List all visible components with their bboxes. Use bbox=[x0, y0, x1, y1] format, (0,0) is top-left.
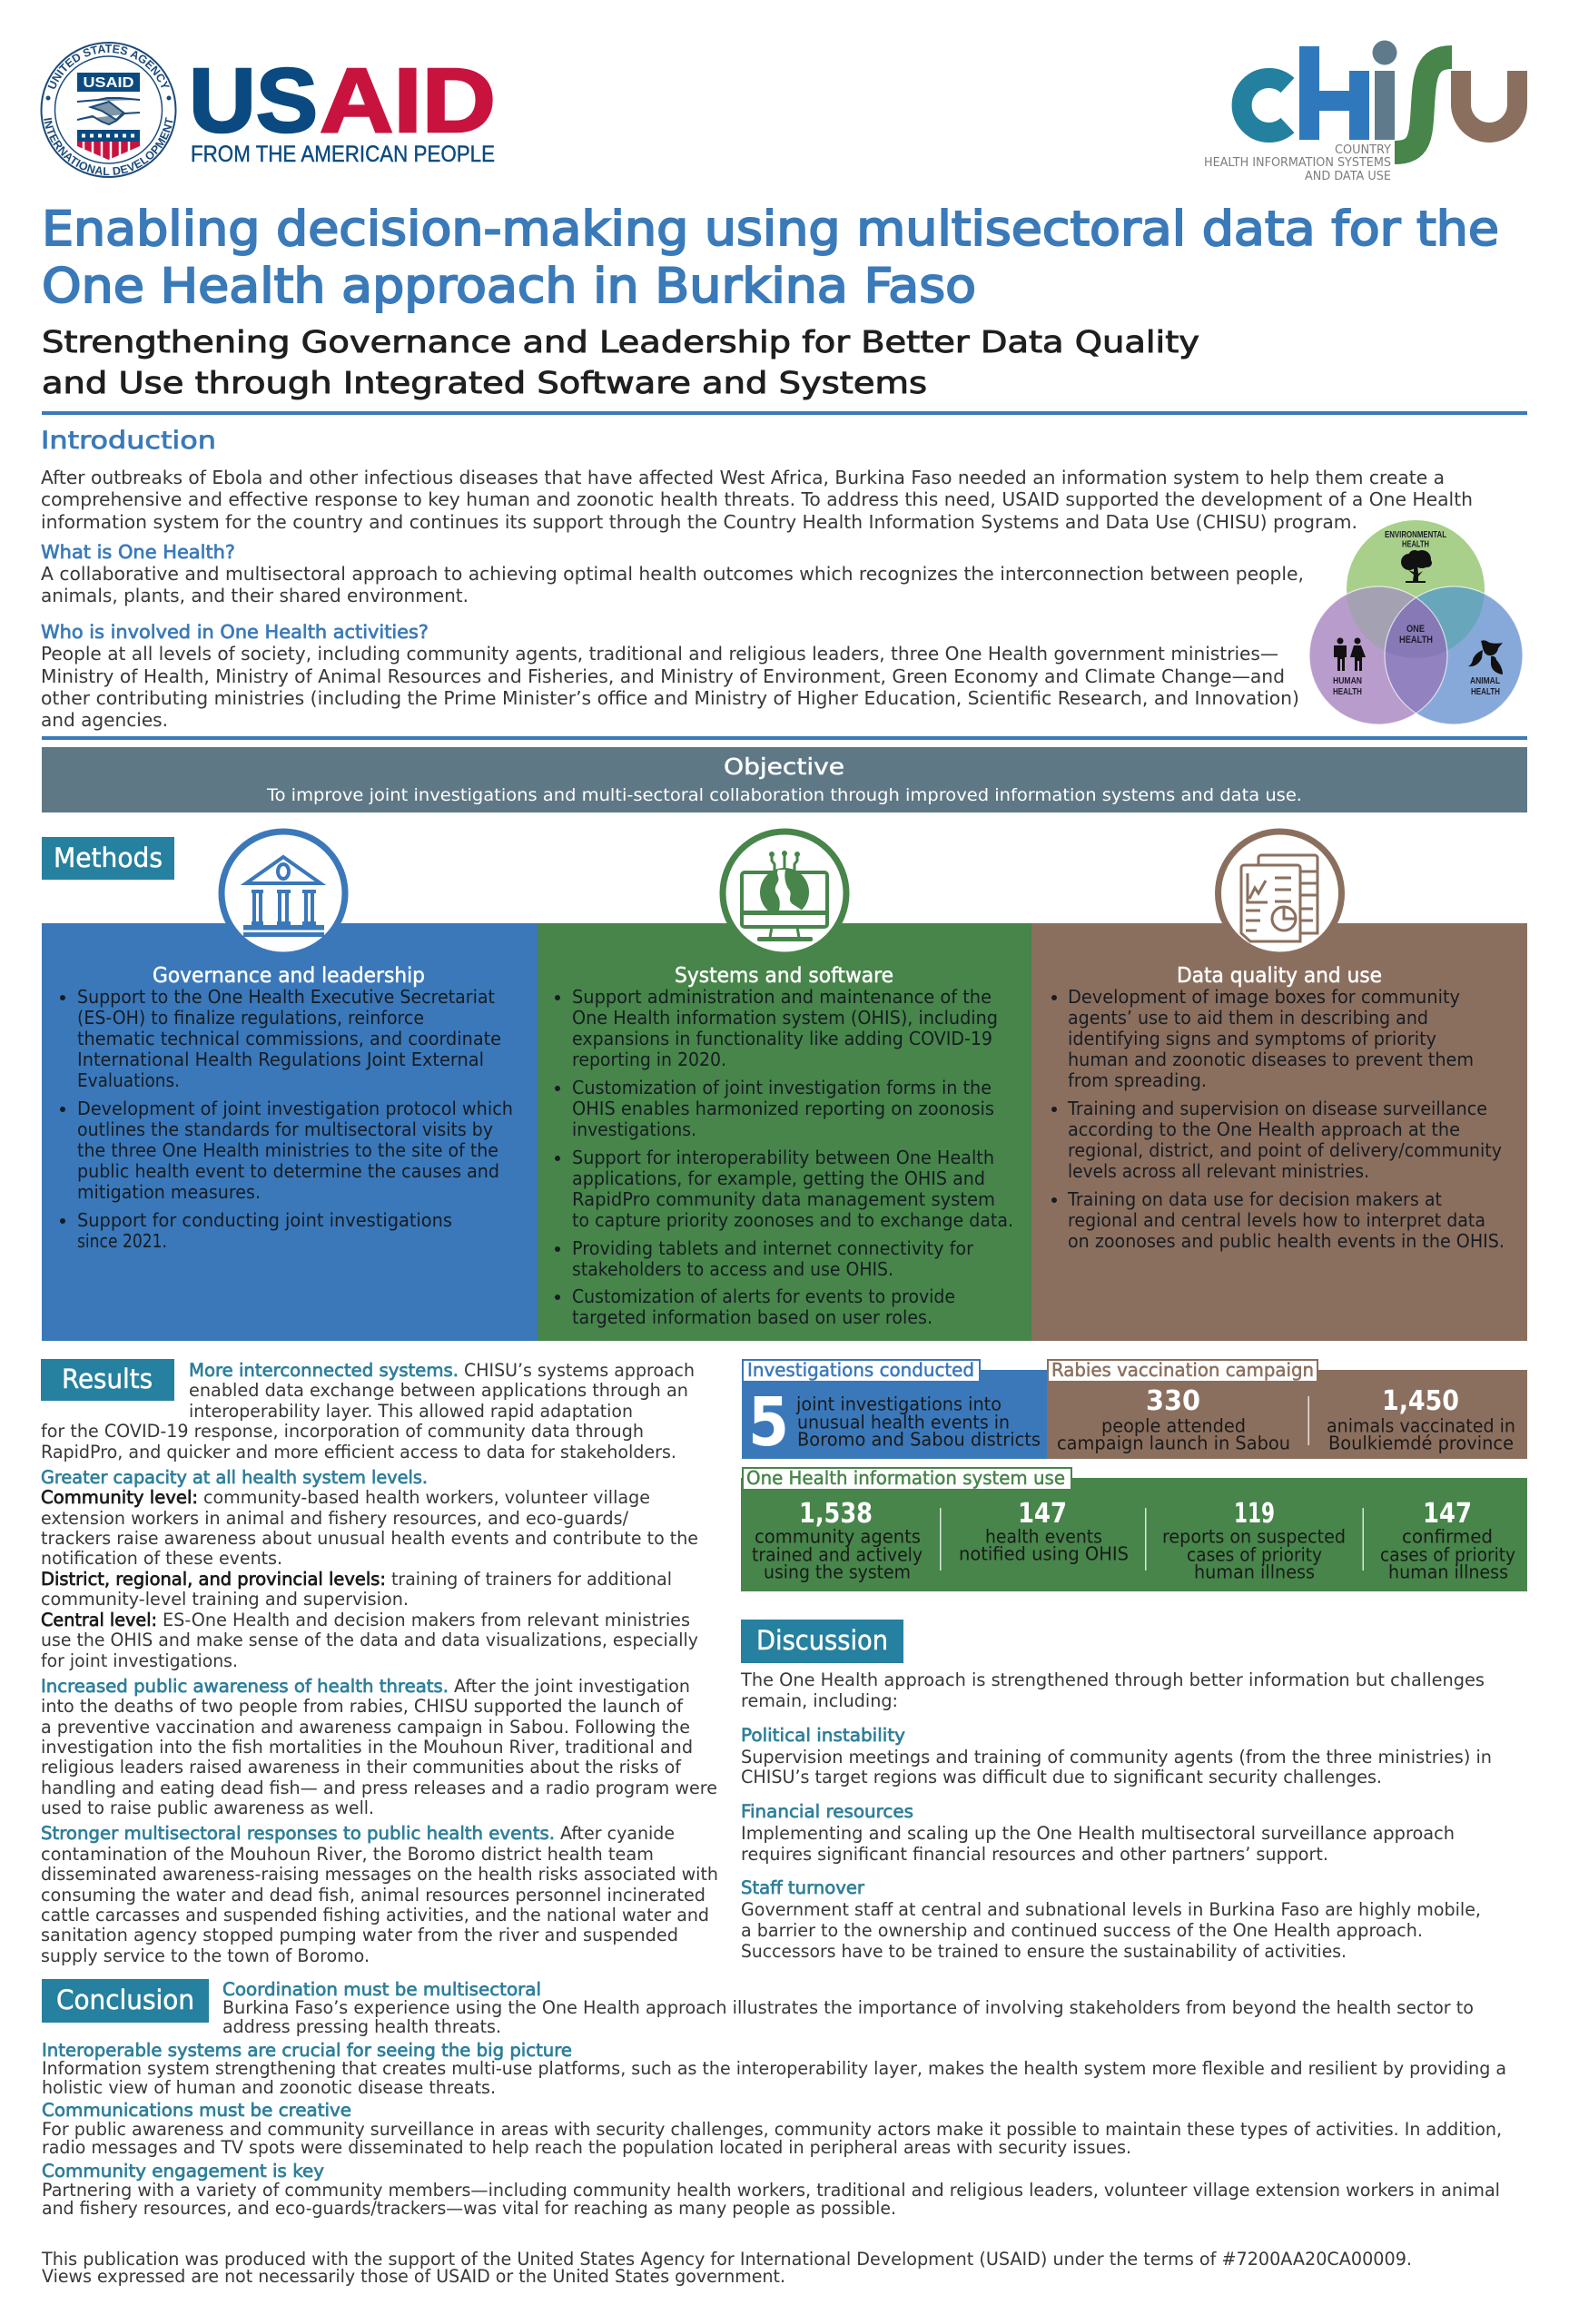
challenge: staff turnover: Government staff at central and subnational levels in Burkina Faso are highly mobile, bbox=[741, 1899, 1481, 1920]
result: more interconnected systems: interoperability layer. This allowed rapid adaptation bbox=[189, 1401, 633, 1422]
list: data quality bullets: regional and central levels how to interpret data bbox=[1068, 1209, 1485, 1231]
list: systems bullets: Customization of joint investigation forms in the bbox=[572, 1077, 992, 1098]
text: conclusion bbox=[42, 1979, 1506, 2219]
heading: discussion bbox=[741, 1620, 903, 1663]
footer: disclaimer: This publication was produced with the support of the United States Agency for International Development (USAID) under the terms of #7200AA20CA00009. bbox=[41, 2249, 1412, 2270]
stat: 147 confirmed cases: 147 bbox=[1423, 1498, 1472, 1530]
list: data quality bullets bbox=[1051, 986, 1505, 1252]
text: investigations description bbox=[795, 1393, 1041, 1451]
list: governance bullets: Evaluations. bbox=[77, 1069, 180, 1091]
panel: systems and software bbox=[538, 832, 1031, 1341]
stat: 1,538 community agents bbox=[752, 1498, 923, 1583]
chart: One Health venn diagram: HEALTH bbox=[1399, 635, 1433, 645]
list: systems bullets: stakeholders to access and use OHIS. bbox=[572, 1258, 893, 1280]
stat: 330 people bbox=[1057, 1385, 1290, 1454]
chart: One Health venn diagram: HUMAN bbox=[1333, 675, 1362, 686]
result: stronger multisectoral responses: After cyanide bbox=[560, 1823, 675, 1844]
icon: data documents bbox=[1241, 855, 1317, 941]
stat: 119 reports bbox=[1162, 1498, 1346, 1583]
list: governance bullets: Support for conducting joint investigations bbox=[77, 1209, 452, 1231]
stat: 1,450 animals: animals vaccinated in bbox=[1327, 1414, 1515, 1436]
result: greater capacity: ES-One Health and decision makers from relevant ministries bbox=[163, 1610, 690, 1630]
stat: 330 people: campaign launch in Sabou bbox=[1057, 1433, 1290, 1454]
point: interoperable systems: holistic view of human and zoonotic disease threats. bbox=[42, 2077, 496, 2098]
stat: 147 confirmed cases bbox=[1380, 1498, 1515, 1583]
stat: 1,450 animals: Boulkiemdé province bbox=[1328, 1433, 1514, 1454]
point: communications: For public awareness and community surveillance in areas with security challenges, community actors make it possible to maintain these types of activities. In addition, bbox=[42, 2119, 1502, 2140]
challenge: staff turnover: Staff turnover bbox=[741, 1877, 865, 1898]
stat: 119 reports: human illness bbox=[1194, 1561, 1315, 1583]
challenge: financial resources bbox=[741, 1801, 1455, 1865]
logo: USAID seal: INTERNATIONAL DEVELOPMENT bbox=[44, 117, 173, 176]
text: who is involved: Who is involved in One Health activities? bbox=[41, 621, 429, 643]
list: data quality bullets: agents’ use to aid them in describing and bbox=[1068, 1007, 1428, 1029]
heading: methods bbox=[42, 837, 174, 880]
result: stronger multisectoral responses: disseminated awareness-raising messages on the health risks associated with bbox=[41, 1864, 718, 1885]
stat: 1,538 community agents: community agents bbox=[755, 1525, 921, 1547]
result: increased public awareness: After the joint investigation bbox=[454, 1676, 690, 1697]
text: discussion: remain, including: bbox=[741, 1690, 898, 1711]
list: systems bullets: Providing tablets and internet connectivity for bbox=[572, 1237, 974, 1259]
stat: 147 health events: 147 bbox=[1018, 1498, 1067, 1530]
result: greater capacity: Central level: bbox=[41, 1610, 157, 1630]
heading: results: Results bbox=[62, 1364, 153, 1394]
subtitle: Strengthening Governance and Leadership for Better Data Quality bbox=[42, 324, 1199, 359]
result: increased public awareness: a preventive vaccination and awareness campaign in Sabou. Following the bbox=[41, 1717, 690, 1738]
list: data quality bullets: according to the One Health approach at the bbox=[1068, 1118, 1460, 1140]
list: data quality bullets: regional, district, and point of delivery/community bbox=[1068, 1139, 1502, 1161]
list: systems bullets: applications, for example, getting the OHIS and bbox=[572, 1167, 985, 1189]
text: investigations description: unusual health events in bbox=[797, 1411, 1010, 1433]
text: what is One Health: animals, plants, and their shared environment. bbox=[41, 585, 469, 606]
logo: USAID wordmark bbox=[189, 50, 496, 167]
list: data quality bullets: from spreading. bbox=[1068, 1069, 1207, 1091]
text: what is One Health: A collaborative and multisectoral approach to achieving optimal health outcomes which recognizes the interconnection between people, bbox=[41, 563, 1304, 585]
text: introduction paragraph: After outbreaks of Ebola and other infectious diseases that have affected West Africa, Burkina Faso needed an information system to help them create a bbox=[41, 467, 1445, 488]
list: data quality bullets: Training on data use for decision makers at bbox=[1067, 1188, 1442, 1210]
stat: 330 people: people attended bbox=[1101, 1414, 1246, 1436]
chart: One Health venn diagram: ONE bbox=[1406, 624, 1425, 635]
chart: One Health venn diagram: ANIMAL bbox=[1470, 675, 1500, 686]
panel: One Health information system use bbox=[741, 1467, 1527, 1591]
point: community engagement: Community engagement is key bbox=[42, 2161, 324, 2181]
point: communications: radio messages and TV spots were disseminated to help reach the population located in peripheral areas with security issues. bbox=[42, 2137, 1131, 2158]
stat: 330 people: 330 bbox=[1146, 1385, 1200, 1417]
point: interoperable systems: Interoperable systems are crucial for seeing the big picture bbox=[42, 2040, 572, 2061]
list: governance bullets bbox=[60, 986, 513, 1252]
title: One Health approach in Burkina Faso bbox=[42, 259, 976, 314]
stat: 119 reports: 119 bbox=[1234, 1498, 1275, 1530]
result: greater capacity: use the OHIS and make sense of the data and data visualizations, especially bbox=[41, 1630, 698, 1650]
logo: USAID seal: UNITED STATES AGENCY bbox=[47, 44, 170, 89]
list: systems bullets: investigations. bbox=[572, 1118, 696, 1140]
list: systems bullets: reporting in 2020. bbox=[572, 1049, 726, 1070]
result: greater capacity: for joint investigations. bbox=[41, 1650, 238, 1671]
logo: USAID wordmark: AID bbox=[320, 50, 496, 152]
result: stronger multisectoral responses: sanitation agency stopped pumping water from the river and suspended bbox=[41, 1925, 678, 1945]
text: what is One Health bbox=[41, 541, 1304, 606]
list: data quality bullets: human and zoonotic diseases to prevent them bbox=[1068, 1049, 1474, 1070]
list: governance bullets: outlines the standards for multisectoral visits by bbox=[77, 1118, 493, 1140]
text: what is One Health: What is One Health? bbox=[41, 541, 235, 563]
list: systems bullets bbox=[555, 986, 1013, 1328]
result: stronger multisectoral responses: contamination of the Mouhoun River, the Boromo district health team bbox=[41, 1844, 654, 1865]
result: stronger multisectoral responses bbox=[41, 1823, 718, 1966]
text: discussion bbox=[740, 1669, 1492, 1962]
challenge: staff turnover: Successors have to be trained to ensure the sustainability of activities. bbox=[741, 1941, 1347, 1962]
point: interoperable systems: Information system strengthening that creates multi-use platforms, such as the interoperability layer, makes the health system more flexible and resilient by providing a bbox=[42, 2058, 1506, 2079]
result: increased public awareness: into the deaths of two people from rabies, CHISU supported the launch of bbox=[41, 1696, 684, 1717]
point: coordination: address pressing health threats. bbox=[222, 2016, 501, 2037]
text: who is involved: and agencies. bbox=[41, 709, 168, 731]
result: greater capacity bbox=[41, 1467, 698, 1671]
challenge: financial resources: requires significant financial resources and other partners’ support. bbox=[741, 1844, 1328, 1865]
list: governance bullets: the three One Health ministries to the site of the bbox=[77, 1139, 498, 1161]
result: increased public awareness: used to raise public awareness as well. bbox=[41, 1797, 374, 1818]
result: greater capacity: training of trainers for additional bbox=[391, 1569, 672, 1590]
heading: conclusion bbox=[42, 1979, 209, 2023]
heading: introduction: Introduction bbox=[41, 427, 216, 455]
list: data quality bullets: on zoonoses and public health events in the OHIS. bbox=[1068, 1230, 1505, 1252]
list: systems bullets: Support for interoperability between One Health bbox=[572, 1147, 994, 1168]
chart: One Health venn diagram bbox=[1309, 520, 1523, 724]
list: systems bullets: One Health information system (OHIS), including bbox=[572, 1007, 998, 1029]
result: greater capacity: extension workers in animal and fishery resources, and eco-guards/ bbox=[41, 1508, 628, 1529]
chart: One Health venn diagram: HEALTH bbox=[1333, 686, 1362, 697]
panel: governance and leadership: Governance and leadership bbox=[153, 964, 425, 988]
heading: methods: Methods bbox=[54, 842, 163, 873]
text: investigations description: Boromo and Sabou districts bbox=[797, 1429, 1041, 1451]
point: community engagement: Partnering with a variety of community members—including community health workers, traditional and religious leaders, volunteer village extension workers in animal bbox=[42, 2180, 1500, 2201]
list: governance bullets: Development of joint investigation protocol which bbox=[77, 1098, 513, 1119]
point: communications bbox=[42, 2100, 1502, 2158]
list: data quality bullets: Development of image boxes for community bbox=[1068, 986, 1460, 1008]
logo: CHISU bbox=[1204, 40, 1517, 183]
stat: 1,450 animals: 1,450 bbox=[1382, 1385, 1459, 1417]
stat: 119 reports: cases of priority bbox=[1187, 1543, 1322, 1565]
list: systems bullets: to capture priority zoonoses and to exchange data. bbox=[572, 1209, 1013, 1231]
challenge: staff turnover: a barrier to the ownership and continued success of the One Health approach. bbox=[741, 1920, 1423, 1941]
list: data quality bullets: levels across all relevant ministries. bbox=[1068, 1160, 1369, 1182]
panel: One Health information system use: One Health information system use bbox=[746, 1467, 1065, 1489]
challenge: financial resources: Implementing and scaling up the One Health multisectoral surveillance approach bbox=[741, 1823, 1455, 1844]
result: greater capacity: community-level training and supervision. bbox=[41, 1589, 409, 1610]
text: introduction paragraph: comprehensive and effective response to key human and zoonotic health threats. To address this need, USAID supported the development of a One Health bbox=[41, 488, 1473, 510]
list: systems bullets: expansions in functionality like adding COVID-19 bbox=[572, 1028, 992, 1049]
heading: discussion: Discussion bbox=[756, 1625, 888, 1656]
result: increased public awareness bbox=[41, 1676, 717, 1818]
logo: CHISU: COUNTRY bbox=[1335, 143, 1392, 157]
heading: conclusion: Conclusion bbox=[56, 1984, 194, 2015]
panel: investigations conducted bbox=[742, 1359, 1047, 1462]
result: more interconnected systems: CHISU’s systems approach bbox=[464, 1360, 695, 1381]
panel: data quality and use bbox=[1031, 832, 1527, 1341]
panel: systems and software: Systems and software bbox=[675, 964, 893, 988]
icon: tree bbox=[1401, 550, 1432, 583]
panel: rabies vaccination campaign bbox=[1047, 1359, 1527, 1459]
challenge: political instability bbox=[741, 1725, 1492, 1787]
list: systems bullets: Support administration and maintenance of the bbox=[572, 986, 992, 1008]
footer: disclaimer: Views expressed are not necessarily those of USAID or the United States government. bbox=[42, 2266, 785, 2287]
challenge: political instability: CHISU’s target regions was difficult due to significant security challenges. bbox=[741, 1767, 1382, 1787]
logo: USAID wordmark: US bbox=[189, 50, 318, 152]
result: more interconnected systems: RapidPro, and quicker and more efficient access to data for stakeholders. bbox=[41, 1442, 676, 1462]
list: governance bullets: International Health Regulations Joint External bbox=[77, 1049, 484, 1070]
point: interoperable systems bbox=[42, 2040, 1506, 2098]
text: who is involved bbox=[41, 621, 1299, 731]
point: coordination: Burkina Faso’s experience using the One Health approach illustrates the importance of involving stakeholders from beyond the health sector to bbox=[222, 1997, 1474, 2018]
text: results narrative bbox=[41, 1360, 718, 1966]
list: governance bullets: mitigation measures. bbox=[77, 1181, 261, 1203]
icon: animals bbox=[1468, 640, 1503, 675]
result: increased public awareness: Increased public awareness of health threats. bbox=[41, 1676, 449, 1697]
challenge: political instability: Political instability bbox=[741, 1725, 905, 1746]
result: greater capacity: Community level: bbox=[41, 1487, 198, 1508]
point: coordination: Coordination must be multisectoral bbox=[222, 1979, 541, 2000]
text: who is involved: other contributing ministries (including the Prime Minister’s office and Ministry of Higher Education, Scientific Research, and Innovation) bbox=[41, 687, 1299, 709]
stat: 119 reports: reports on suspected bbox=[1162, 1525, 1346, 1547]
logo: USAID seal: USAID bbox=[84, 75, 134, 91]
challenge: political instability: Supervision meetings and training of community agents (from the three ministries) in bbox=[741, 1747, 1492, 1768]
result: increased public awareness: religious leaders raised awareness in their communities about the risks of bbox=[41, 1757, 682, 1777]
logo: CHISU: AND DATA USE bbox=[1305, 169, 1391, 183]
stat: 147 health events bbox=[959, 1498, 1129, 1565]
result: greater capacity: notification of these events. bbox=[41, 1548, 282, 1569]
result: more interconnected systems bbox=[41, 1360, 695, 1462]
panel: rabies vaccination campaign: Rabies vaccination campaign bbox=[1051, 1359, 1314, 1381]
list: data quality bullets: Training and supervision on disease surveillance bbox=[1067, 1098, 1487, 1119]
stat: 147 health events: health events bbox=[985, 1525, 1102, 1547]
chart: One Health venn diagram: HEALTH bbox=[1471, 686, 1500, 697]
title: Enabling decision-making using multisectoral data for the bbox=[42, 202, 1499, 257]
result: more interconnected systems: enabled data exchange between applications through an bbox=[189, 1380, 688, 1401]
stat: 147 confirmed cases: human illness bbox=[1388, 1561, 1508, 1583]
result: increased public awareness: handling and eating dead fish— and press releases and a radio program were bbox=[41, 1777, 717, 1798]
point: coordination bbox=[222, 1979, 1474, 2037]
heading: results bbox=[41, 1359, 174, 1401]
list: systems bullets: targeted information based on user roles. bbox=[572, 1306, 933, 1328]
result: more interconnected systems: for the COVID-19 response, incorporation of community data through bbox=[41, 1421, 644, 1442]
stat: 1,538 community agents: trained and actively bbox=[752, 1543, 923, 1565]
stat: 1,538 community agents: using the system bbox=[764, 1561, 911, 1583]
panel: governance and leadership bbox=[42, 832, 538, 1341]
list: governance bullets: (ES-OH) to finalize regulations, reinforce bbox=[77, 1007, 424, 1029]
list: governance bullets: thematic technical commissions, and coordinate bbox=[77, 1028, 501, 1049]
stat: 1,538 community agents: 1,538 bbox=[799, 1498, 873, 1530]
stat: 1,450 animals bbox=[1327, 1385, 1515, 1454]
text: who is involved: Ministry of Health, Ministry of Animal Resources and Fisheries, and Ministry of Environment, Green Economy and Climate Change—and bbox=[41, 665, 1285, 687]
point: community engagement bbox=[42, 2161, 1500, 2219]
stat: 147 health events: notified using OHIS bbox=[959, 1543, 1129, 1565]
icon: government building bbox=[243, 857, 324, 937]
panel: objective bbox=[42, 747, 1527, 812]
point: community engagement: and fishery resources, and eco-guards/trackers—was vital for reaching as many people as possible. bbox=[42, 2198, 896, 2219]
chart: One Health venn diagram: HEALTH bbox=[1402, 539, 1429, 550]
panel: objective: Objective bbox=[724, 753, 844, 780]
text: discussion: The One Health approach is strengthened through better information but challenges bbox=[740, 1669, 1485, 1690]
text: who is involved: People at all levels of society, including community agents, traditional and religious leaders, three One Health government ministries— bbox=[41, 643, 1278, 665]
icon: monitor with globe bbox=[742, 851, 827, 941]
result: stronger multisectoral responses: cattle carcasses and suspended fishing activities, and the national water and bbox=[41, 1905, 709, 1925]
panel: objective: To improve joint investigations and multi-sectoral collaboration through improved information systems and data use. bbox=[266, 785, 1302, 805]
logo: USAID seal bbox=[40, 42, 176, 178]
result: greater capacity: Greater capacity at all health system levels. bbox=[41, 1467, 428, 1488]
text: introduction paragraph bbox=[41, 467, 1473, 533]
chart: One Health venn diagram: ENVIRONMENTAL bbox=[1385, 530, 1446, 540]
result: stronger multisectoral responses: consuming the water and dead fish, animal resources personnel incinerated bbox=[41, 1885, 706, 1905]
title bbox=[42, 202, 1499, 314]
result: greater capacity: District, regional, and provincial levels: bbox=[41, 1569, 386, 1590]
result: stronger multisectoral responses: supply service to the town of Boromo. bbox=[41, 1945, 370, 1966]
list: governance bullets: since 2021. bbox=[77, 1230, 167, 1252]
point: communications: Communications must be creative bbox=[42, 2100, 351, 2121]
text: investigations description: joint investigations into bbox=[795, 1393, 1002, 1414]
list: systems bullets: Customization of alerts for events to provide bbox=[572, 1285, 955, 1307]
panel: data quality and use: Data quality and use bbox=[1177, 964, 1382, 988]
panel: investigations conducted: Investigations conducted bbox=[747, 1359, 974, 1381]
list: systems bullets: RapidPro community data management system bbox=[572, 1188, 995, 1210]
list: systems bullets: OHIS enables harmonized reporting on zoonosis bbox=[572, 1098, 994, 1119]
result: more interconnected systems: More interconnected systems. bbox=[189, 1360, 459, 1381]
number: 5 investigations: 5 bbox=[748, 1384, 789, 1462]
list: governance bullets: public health event to determine the causes and bbox=[77, 1160, 499, 1182]
logo: CHISU: HEALTH INFORMATION SYSTEMS bbox=[1204, 155, 1391, 170]
result: greater capacity: community-based health workers, volunteer village bbox=[203, 1487, 650, 1508]
result: increased public awareness: investigation into the fish mortalities in the Mouhoun River, traditional and bbox=[41, 1737, 693, 1758]
section: introduction bbox=[41, 427, 1473, 731]
result: greater capacity: trackers raise awareness about unusual health events and contribute to the bbox=[41, 1528, 698, 1549]
subtitle bbox=[42, 324, 1199, 400]
stat: 147 confirmed cases: confirmed bbox=[1402, 1525, 1493, 1547]
icon: human figures bbox=[1334, 637, 1366, 671]
footer: disclaimer bbox=[41, 2249, 1412, 2287]
subtitle: and Use through Integrated Software and Systems bbox=[42, 365, 927, 400]
result: stronger multisectoral responses: Stronger multisectoral responses to public health events. bbox=[41, 1823, 555, 1844]
text: introduction paragraph: information system for the country and continues its support through the Country Health Information Systems and Data Use (CHISU) program. bbox=[41, 511, 1357, 533]
stat: 147 confirmed cases: cases of priority bbox=[1380, 1543, 1515, 1565]
logo: USAID wordmark: FROM THE AMERICAN PEOPLE bbox=[191, 142, 495, 167]
list: data quality bullets: identifying signs and symptoms of priority bbox=[1068, 1028, 1436, 1049]
challenge: staff turnover bbox=[741, 1877, 1481, 1962]
challenge: financial resources: Financial resources bbox=[741, 1801, 913, 1822]
list: governance bullets: Support to the One Health Executive Secretariat bbox=[77, 986, 495, 1008]
